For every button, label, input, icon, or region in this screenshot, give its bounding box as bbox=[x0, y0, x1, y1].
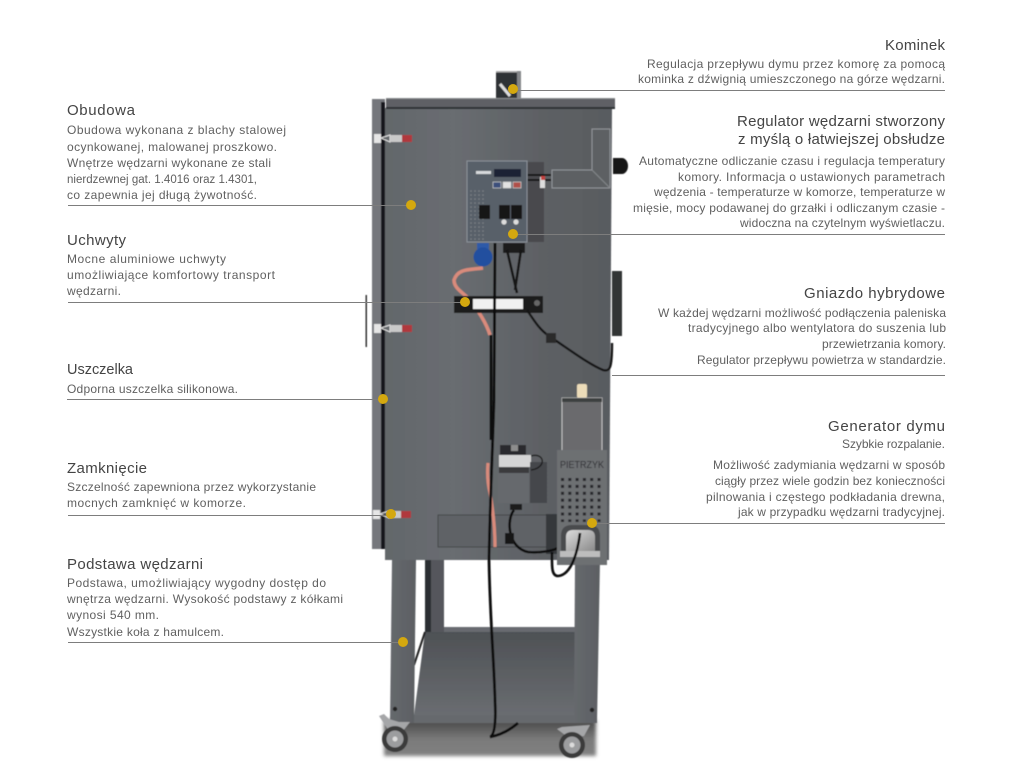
back left leg bbox=[425, 560, 444, 632]
panel: uszczelka: Uszczelka bbox=[67, 362, 134, 378]
lower latch bbox=[373, 510, 411, 519]
panel: podstawa wędzarni: Podstawa wędzarni bbox=[67, 556, 203, 573]
panel: zamknięcie: Szczelność zapewniona przez wykorzystanie bbox=[67, 480, 316, 494]
panel: gniazdo hybrydowe: przewietrzania komory. bbox=[822, 337, 946, 351]
panel: regulator: Regulator wędzarni stworzony bbox=[737, 113, 946, 130]
panel: uchwyty bbox=[66, 232, 276, 298]
panel: obudowa: Wnętrze wędzarni wykonane ze stali bbox=[67, 156, 271, 170]
marker dots bbox=[378, 84, 597, 647]
panel: zamknięcie: mocnych zamknięć w komorze. bbox=[67, 496, 246, 510]
floor shadow bbox=[384, 720, 596, 756]
panel: regulator: mięsie, mocy podawanej do grzałki i odliczanym czasie - bbox=[633, 201, 945, 215]
transport handle bbox=[454, 296, 543, 313]
panel: gniazdo hybrydowe: Regulator przepływu powietrza w standardzie. bbox=[697, 353, 946, 367]
panel: obudowa: co zapewnia jej długą żywotność. bbox=[67, 188, 257, 202]
panel: obudowa: ocynkowanej, malowanej proszkowo. bbox=[67, 140, 277, 154]
panel: podstawa wędzarni: Wszystkie koła z hamulcem. bbox=[67, 625, 224, 639]
right leg bbox=[574, 560, 600, 723]
side knob bbox=[613, 158, 628, 174]
panel: regulator: z myślą o łatwiejszej obsłudze bbox=[738, 131, 945, 148]
vent duct bbox=[552, 129, 610, 188]
main black cable bbox=[489, 243, 518, 737]
blue socket bbox=[474, 243, 492, 266]
leader line: obudowa bbox=[68, 204, 411, 206]
bottom cover box bbox=[438, 514, 557, 554]
ventilation holes bbox=[560, 478, 604, 522]
panel: obudowa bbox=[67, 102, 286, 202]
panel: uszczelka: Odporna uszczelka silikonowa. bbox=[67, 382, 238, 396]
leader line: uchwyty bbox=[68, 302, 465, 304]
stand shelf bbox=[414, 627, 576, 723]
leader line: uszczelka bbox=[67, 398, 383, 400]
panel: gniazdo hybrydowe: W każdej wędzarni możliwość podłączenia paleniska bbox=[658, 306, 946, 320]
panel: generator dymu: ciągły przez wiele godzin bez konieczności bbox=[715, 474, 945, 488]
panel: zamknięcie bbox=[67, 460, 316, 510]
perforated housing bbox=[557, 450, 607, 565]
leader line: regulator bbox=[513, 234, 945, 236]
steel tunnel bbox=[561, 525, 600, 557]
leader line: podstawa bbox=[68, 642, 403, 644]
lower pink cable bbox=[488, 463, 495, 547]
brand text: PIETRZYK bbox=[560, 460, 604, 471]
side rail mark bbox=[366, 295, 367, 347]
leader line: gniazdo bbox=[612, 374, 945, 376]
panel: generator dymu: Szybkie rozpalanie. bbox=[842, 437, 945, 451]
panel: regulator bbox=[633, 113, 946, 230]
panel: gniazdo hybrydowe: tradycyjnego albo wentylatora do suszenia lub bbox=[688, 321, 946, 335]
panel: podstawa wędzarni: wnętrza wędzarni. Wysokość podstawy z kółkami bbox=[66, 592, 343, 606]
leader line: generator bbox=[592, 522, 945, 524]
panel: uchwyty: wędzarni. bbox=[66, 284, 121, 298]
panel: generator dymu: Możliwość zadymiania wędzarni w sposób bbox=[713, 458, 945, 472]
panel: kominek bbox=[638, 37, 946, 86]
side box bbox=[612, 271, 622, 336]
panel: kominek: kominka z dźwignią umieszczonego na górze wędzarni. bbox=[638, 72, 945, 86]
panel: gniazdo hybrydowe: Gniazdo hybrydowe bbox=[804, 285, 945, 302]
panel: regulator: wędzenia - temperaturze w komorze, temperaturze w bbox=[653, 185, 945, 199]
controller panel bbox=[467, 161, 527, 242]
hopper bbox=[562, 398, 602, 451]
panel: generator dymu: jak w przypadku wędzarni tradycyjnej. bbox=[737, 505, 945, 519]
chimney bbox=[496, 71, 521, 98]
door edge bbox=[372, 99, 385, 549]
panel: uchwyty: Uchwyty bbox=[67, 232, 126, 249]
blower unit bbox=[498, 445, 547, 510]
panel: podstawa wędzarni: Podstawa, umożliwiający wygodny dostęp do bbox=[67, 576, 326, 590]
panel: regulator: Automatyczne odliczanie czasu i regulacja temperatury bbox=[639, 154, 945, 168]
controller shadow and wiring bbox=[527, 162, 551, 242]
panel: uchwyty: Mocne aluminiowe uchwyty bbox=[67, 252, 226, 266]
panel: regulator: widoczna na czytelnym wyświetlaczu. bbox=[739, 216, 945, 230]
panel: obudowa: Obudowa bbox=[67, 102, 136, 119]
middle latch bbox=[374, 324, 412, 333]
generator hose bbox=[552, 533, 580, 576]
upper latch bbox=[374, 134, 412, 143]
cables from the controller bbox=[503, 243, 525, 293]
leader line: kominek bbox=[513, 90, 945, 92]
panel: gniazdo hybrydowe bbox=[658, 285, 946, 367]
hopper knob bbox=[577, 384, 587, 398]
smoke generator bbox=[557, 384, 607, 565]
panel: podstawa wędzarni: wynosi 540 mm. bbox=[66, 608, 159, 622]
panel: generator dymu: pilnowania i częstego podkładania drewna, bbox=[706, 490, 945, 504]
leader line: zamknięcie bbox=[68, 514, 391, 516]
panel: generator dymu: Generator dymu bbox=[828, 418, 945, 435]
panel: kominek: Regulacja przepływu dymu przez komorę za pomocą bbox=[647, 57, 945, 71]
panel: regulator: komory. Informacja o ustawionych parametrach bbox=[678, 170, 945, 184]
panel: podstawa wędzarni bbox=[66, 556, 343, 639]
panel: kominek: Kominek bbox=[885, 37, 946, 54]
blower cable bbox=[510, 510, 558, 552]
handle cable bbox=[527, 310, 612, 370]
panel: zamknięcie: Zamknięcie bbox=[67, 460, 147, 477]
right wheel bbox=[557, 725, 590, 758]
front left leg bbox=[390, 560, 416, 723]
panel: generator dymu bbox=[706, 418, 945, 519]
smoker photo bbox=[366, 71, 628, 758]
left wheel bbox=[379, 714, 410, 752]
panel: obudowa: Obudowa wykonana z blachy stalowej bbox=[67, 123, 286, 137]
panel: uszczelka bbox=[67, 362, 238, 396]
panel: obudowa: nierdzewnej gat. 1.4016 oraz 1.4301, bbox=[67, 174, 257, 186]
panel: uchwyty: umożliwiające komfortowy transport bbox=[67, 268, 276, 282]
chamber body bbox=[385, 108, 612, 560]
pink power cable bbox=[454, 268, 490, 335]
top strip bbox=[386, 98, 615, 109]
